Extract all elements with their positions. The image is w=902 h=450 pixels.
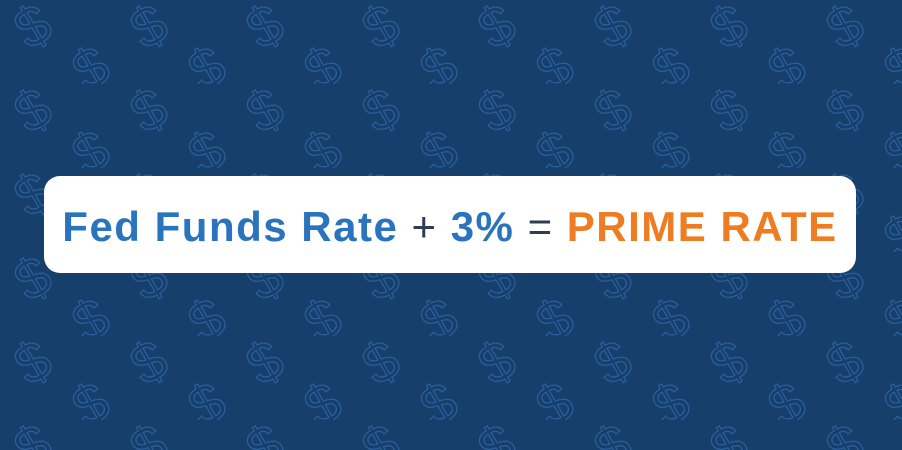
- formula box: [44, 176, 856, 273]
- formula text: Fed Funds Rate + 3% = PRIME RATE: [62, 203, 838, 250]
